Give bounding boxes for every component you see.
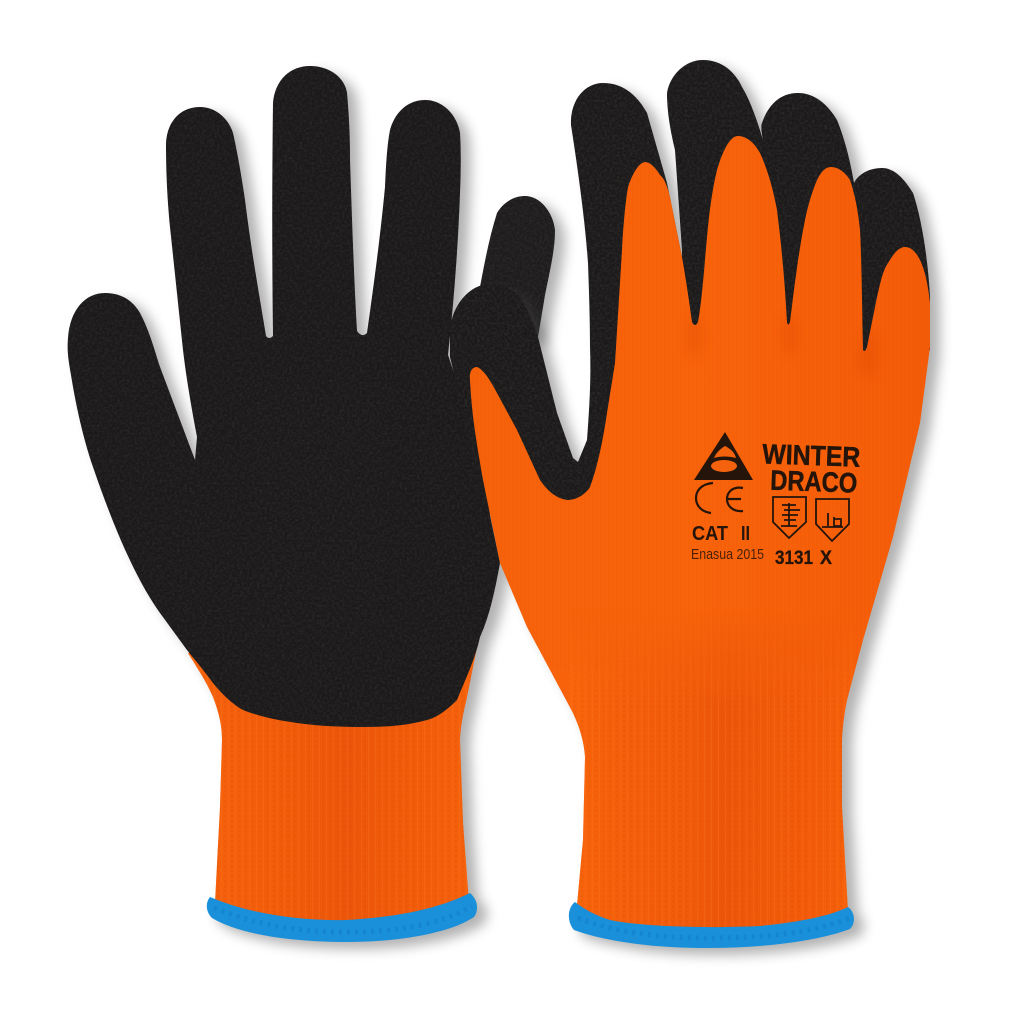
performance code: 3131: [775, 548, 813, 569]
performance code: X: [820, 548, 832, 569]
printed label on glove: [691, 432, 861, 569]
icon: mechanical risk shield: [773, 497, 806, 538]
CE mark: [696, 483, 743, 513]
brand name: DRACO: [770, 465, 858, 499]
standard note: Enasua 2015: [691, 546, 764, 563]
product image: pair of winter gloves: [68, 60, 947, 962]
brand name: [762, 438, 861, 499]
right glove: back of hand facing viewer: [445, 55, 940, 948]
left glove ribbed cuff: [185, 645, 480, 935]
logo: triangle with eye: [694, 432, 753, 480]
left glove: palm side facing viewer: [60, 60, 565, 942]
certification line: [692, 523, 750, 545]
left glove black latex palm: [60, 60, 505, 735]
certification line: II: [741, 523, 750, 545]
left glove thumb: [480, 196, 555, 337]
right glove orange knit body: [465, 130, 940, 940]
icon: cold risk shield: [816, 499, 849, 541]
certification line: CAT: [692, 523, 728, 545]
right glove black fingertips and thumb: [445, 55, 935, 525]
left glove shadow: [78, 73, 565, 949]
right glove shadow: [460, 67, 940, 955]
brand name: WINTER: [762, 438, 861, 473]
right glove blue hem: [569, 902, 854, 948]
left glove blue hem: [207, 893, 477, 942]
